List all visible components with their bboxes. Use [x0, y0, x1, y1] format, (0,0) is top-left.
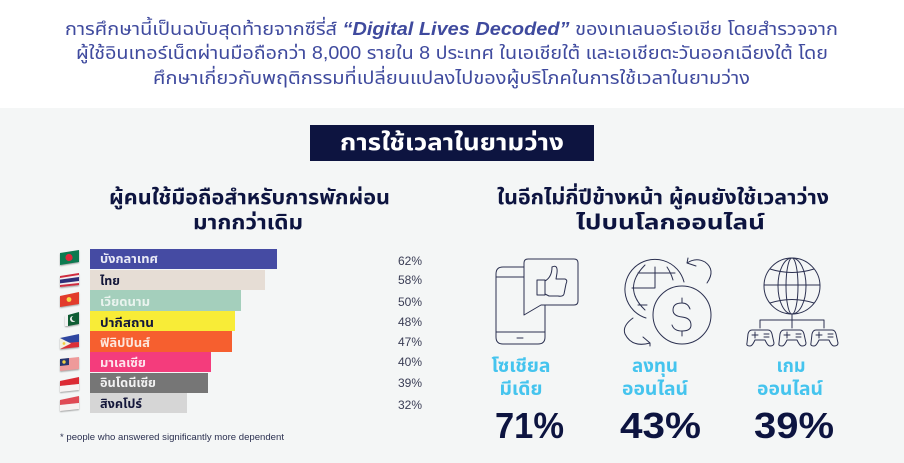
bar: Bangladesh: 62%: [398, 254, 422, 268]
bar: Vietnam: 50%: [398, 295, 422, 309]
bar: Pakistan: 48%: [398, 315, 422, 329]
bar: Singapore: 32%: [398, 398, 422, 412]
icon: phone with thumbs up: [496, 259, 578, 344]
intro text block: ศึกษาเกี่ยวกับพฤติกรรมที่เปลี่ยนแปลงไปของผู้บริโภคในการใช้เวลาในยามว่าง: [153, 65, 750, 90]
title banner: [310, 125, 594, 161]
icon: flag Bangladesh: [60, 250, 79, 265]
intro text block: [65, 16, 838, 90]
stat: online gaming: เกม: [776, 356, 806, 377]
stat: social media: 71%: [495, 405, 564, 446]
heading: left: ผู้คนใช้มือถือสำหรับการพักผ่อน: [109, 187, 390, 209]
bar: Pakistan: ปากีสถาน: [100, 316, 154, 330]
bar: Bangladesh: บังกลาเทศ: [100, 252, 158, 266]
stat: online gaming: 39%: [754, 405, 834, 446]
icon: globe with game controllers: [747, 258, 838, 346]
bar: Thailand: 58%: [398, 273, 422, 287]
stat: online gaming: ออนไลน์: [757, 379, 823, 400]
intro text block: ผู้ใช้อินเทอร์เน็ตผ่านมือถือกว่า 8,000 รายใน 8 ประเทศ ในเอเชียใต้ และเอเชียตะวันออกเฉียงใต้ โดย: [76, 43, 828, 65]
title banner: การใช้เวลาในยามว่าง: [340, 129, 564, 155]
bar: Thailand: ไทย: [100, 274, 120, 288]
flags column: [60, 250, 79, 411]
icon: flag Singapore: [60, 396, 79, 411]
bar: Indonesia: อินโดนีเซีย: [100, 376, 156, 390]
bar chart: [90, 249, 422, 413]
stat: social media: มีเดีย: [500, 379, 542, 400]
heading: right: [497, 183, 829, 234]
bar: Singapore: สิงคโปร์: [100, 397, 142, 411]
stat: online investing: 43%: [620, 405, 701, 446]
stat: online investing: ออนไลน์: [622, 379, 688, 400]
icon: globe with dollar and arrows: [624, 258, 711, 346]
intro text block: การศึกษานี้เป็นฉบับสุดท้ายจากซีรี่ส์ “Digital Lives Decoded” ของเทเลนอร์เอเชีย โดยสำรวจจาก: [65, 16, 838, 40]
bar: Vietnam: เวียดนาม: [100, 295, 150, 309]
stat: online gaming: [754, 356, 834, 446]
bar: Vietnam: [90, 290, 422, 311]
bar: Indonesia: [90, 373, 422, 393]
stat: online investing: [620, 356, 701, 446]
bar: Thailand: [90, 270, 422, 290]
bar: Philippines: [90, 331, 422, 352]
stat: social media: โซเชียล: [492, 356, 550, 377]
bar: Bangladesh: [90, 249, 422, 269]
icon: flag Pakistan: [65, 312, 79, 326]
stat: social media: [492, 356, 564, 446]
heading: left: มากกว่าเดิม: [193, 212, 303, 234]
icon: flag Vietnam: [60, 292, 79, 307]
icon: flag Philippines: [60, 334, 79, 349]
bar: Indonesia: 39%: [398, 376, 422, 390]
heading: right: ไปบนโลกออนไลน์: [576, 212, 765, 234]
heading: left: [109, 187, 390, 234]
bar: Malaysia: 40%: [398, 355, 422, 369]
icon: flag Indonesia: [60, 377, 79, 392]
stat: online investing: ลงทุน: [632, 356, 678, 377]
bar: Singapore: [90, 393, 422, 413]
footnote: * people who answered significantly more dependent: [60, 432, 284, 442]
bar: Philippines: ฟิลิปปินส์: [100, 336, 150, 350]
bar: Philippines: 47%: [398, 335, 422, 349]
heading: right: ในอีกไม่กี่ปีข้างหน้า ผู้คนยังใช้เวลาว่าง: [497, 183, 829, 209]
bar: Malaysia: [90, 352, 422, 372]
icon: flag Thailand: [60, 273, 79, 287]
bar: Pakistan: [90, 311, 422, 331]
icon: flag Malaysia: [60, 357, 79, 371]
bar: Malaysia: มาเลเซีย: [100, 356, 146, 370]
